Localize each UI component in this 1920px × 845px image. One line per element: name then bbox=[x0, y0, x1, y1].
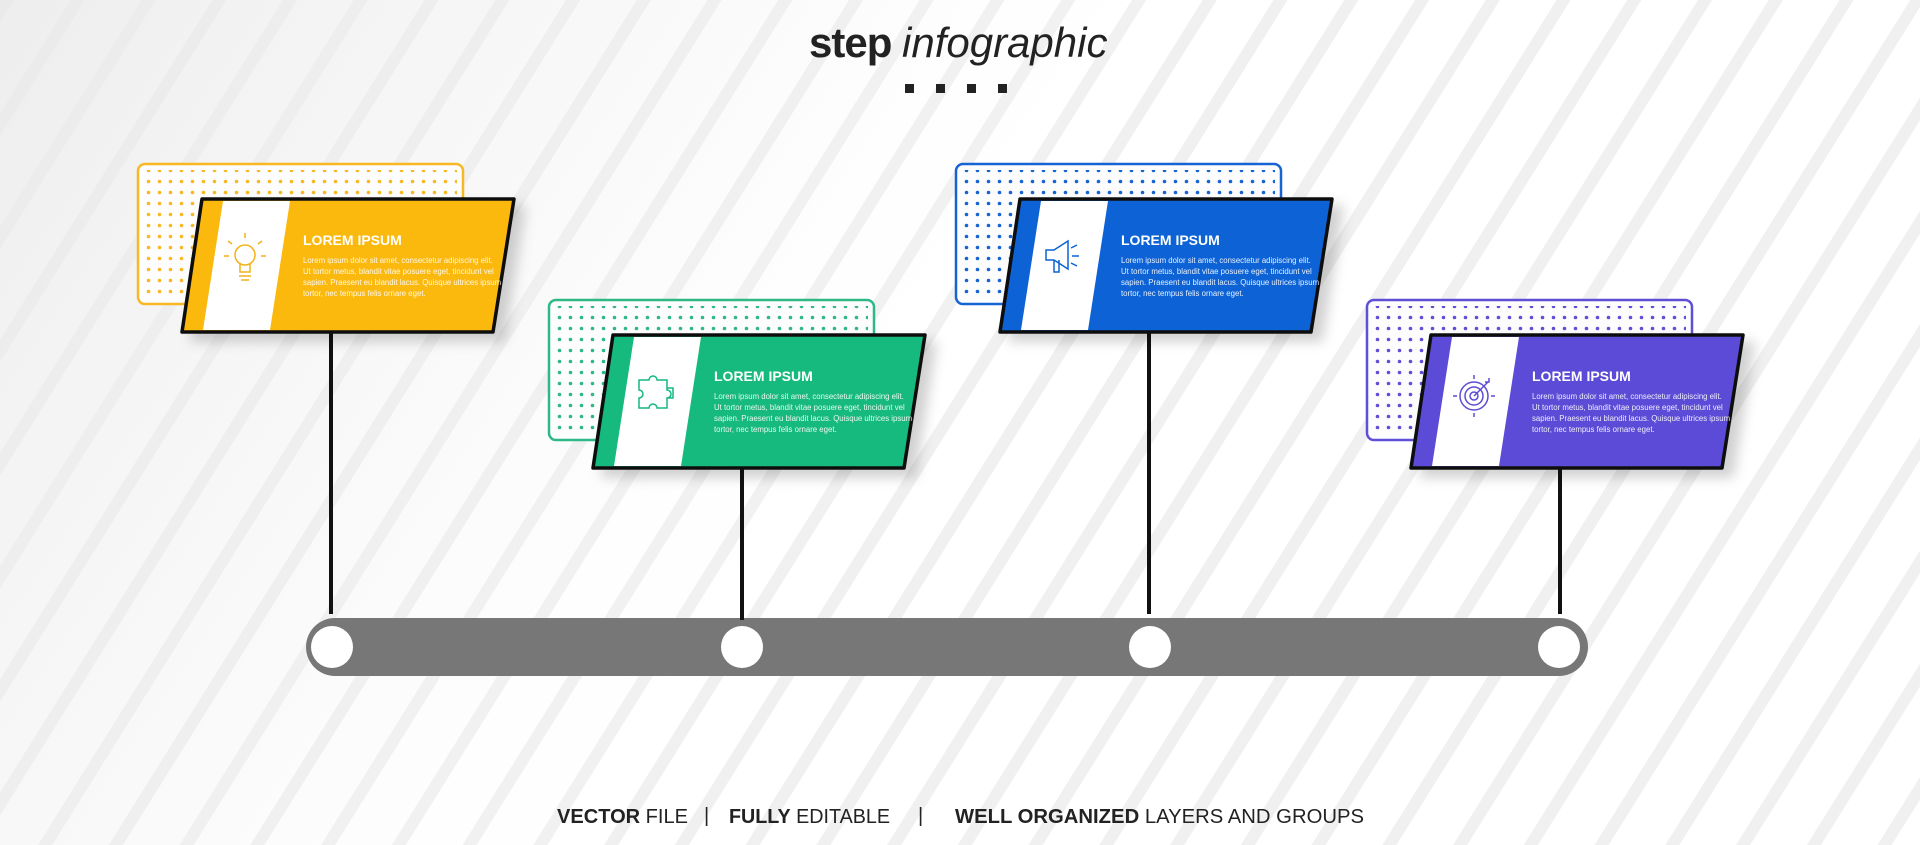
footer text: | bbox=[704, 805, 709, 827]
footer text: VECTOR FILE bbox=[557, 806, 688, 828]
panel: step 3 blue bbox=[956, 164, 1332, 332]
footer text bbox=[557, 805, 1364, 828]
panel: step 1 yellow: tortor, nec tempus felis ornare eget. bbox=[303, 289, 426, 298]
panel: step 3 blue: sapien. Praesent eu blandit lacus. Quisque ultrices ipsum bbox=[1121, 278, 1319, 287]
title dots bbox=[905, 84, 1007, 93]
panel: step 2 green: Ut tortor metus, blandit vitae posuere eget, tincidunt vel bbox=[714, 403, 905, 412]
icon: puzzle bbox=[639, 376, 673, 408]
panel: step 2 green: sapien. Praesent eu blandit lacus. Quisque ultrices ipsum bbox=[714, 414, 912, 423]
panel: step 2 green: Lorem ipsum dolor sit amet, consectetur adipiscing elit. bbox=[714, 392, 904, 401]
timeline bar bbox=[306, 618, 1588, 676]
icon: target bbox=[1453, 375, 1495, 417]
panel: step 1 yellow: LOREM IPSUM bbox=[303, 232, 402, 248]
panel: step 3 blue: LOREM IPSUM bbox=[1121, 232, 1220, 248]
panel: step 4 purple: sapien. Praesent eu blandit lacus. Quisque ultrices ipsum bbox=[1532, 414, 1730, 423]
stems bbox=[331, 332, 1560, 620]
panel: step 4 purple bbox=[1367, 300, 1743, 468]
panel: step 4 purple: Ut tortor metus, blandit vitae posuere eget, tincidunt vel bbox=[1532, 403, 1723, 412]
panel: step 3 blue: Ut tortor metus, blandit vitae posuere eget, tincidunt vel bbox=[1121, 267, 1312, 276]
title: step bbox=[809, 19, 891, 66]
panel: step 4 purple: LOREM IPSUM bbox=[1532, 368, 1631, 384]
panel: step 1 yellow: Lorem ipsum dolor sit amet, consectetur adipiscing elit. bbox=[303, 256, 493, 265]
panel: step 2 green bbox=[549, 300, 925, 468]
panel: step 2 green: LOREM IPSUM bbox=[714, 368, 813, 384]
footer text: WELL ORGANIZED LAYERS AND GROUPS bbox=[955, 806, 1364, 828]
title bbox=[809, 19, 1107, 66]
panel: step 1 yellow: sapien. Praesent eu blandit lacus. Quisque ultrices ipsum bbox=[303, 278, 501, 287]
footer text: | bbox=[918, 805, 923, 827]
panel: step 3 blue: tortor, nec tempus felis ornare eget. bbox=[1121, 289, 1244, 298]
panel: step 3 blue: Lorem ipsum dolor sit amet, consectetur adipiscing elit. bbox=[1121, 256, 1311, 265]
panel: step 4 purple: tortor, nec tempus felis ornare eget. bbox=[1532, 425, 1655, 434]
icon: megaphone bbox=[1046, 241, 1079, 272]
panel: step 1 yellow: Ut tortor metus, blandit vitae posuere eget, tincidunt vel bbox=[303, 267, 494, 276]
footer text: FULLY EDITABLE bbox=[729, 806, 890, 828]
panel: step 4 purple: Lorem ipsum dolor sit amet, consectetur adipiscing elit. bbox=[1532, 392, 1722, 401]
icon: light bulb bbox=[224, 233, 266, 280]
panel: step 1 yellow bbox=[138, 164, 514, 332]
title: infographic bbox=[902, 19, 1107, 66]
panel: step 2 green: tortor, nec tempus felis ornare eget. bbox=[714, 425, 837, 434]
